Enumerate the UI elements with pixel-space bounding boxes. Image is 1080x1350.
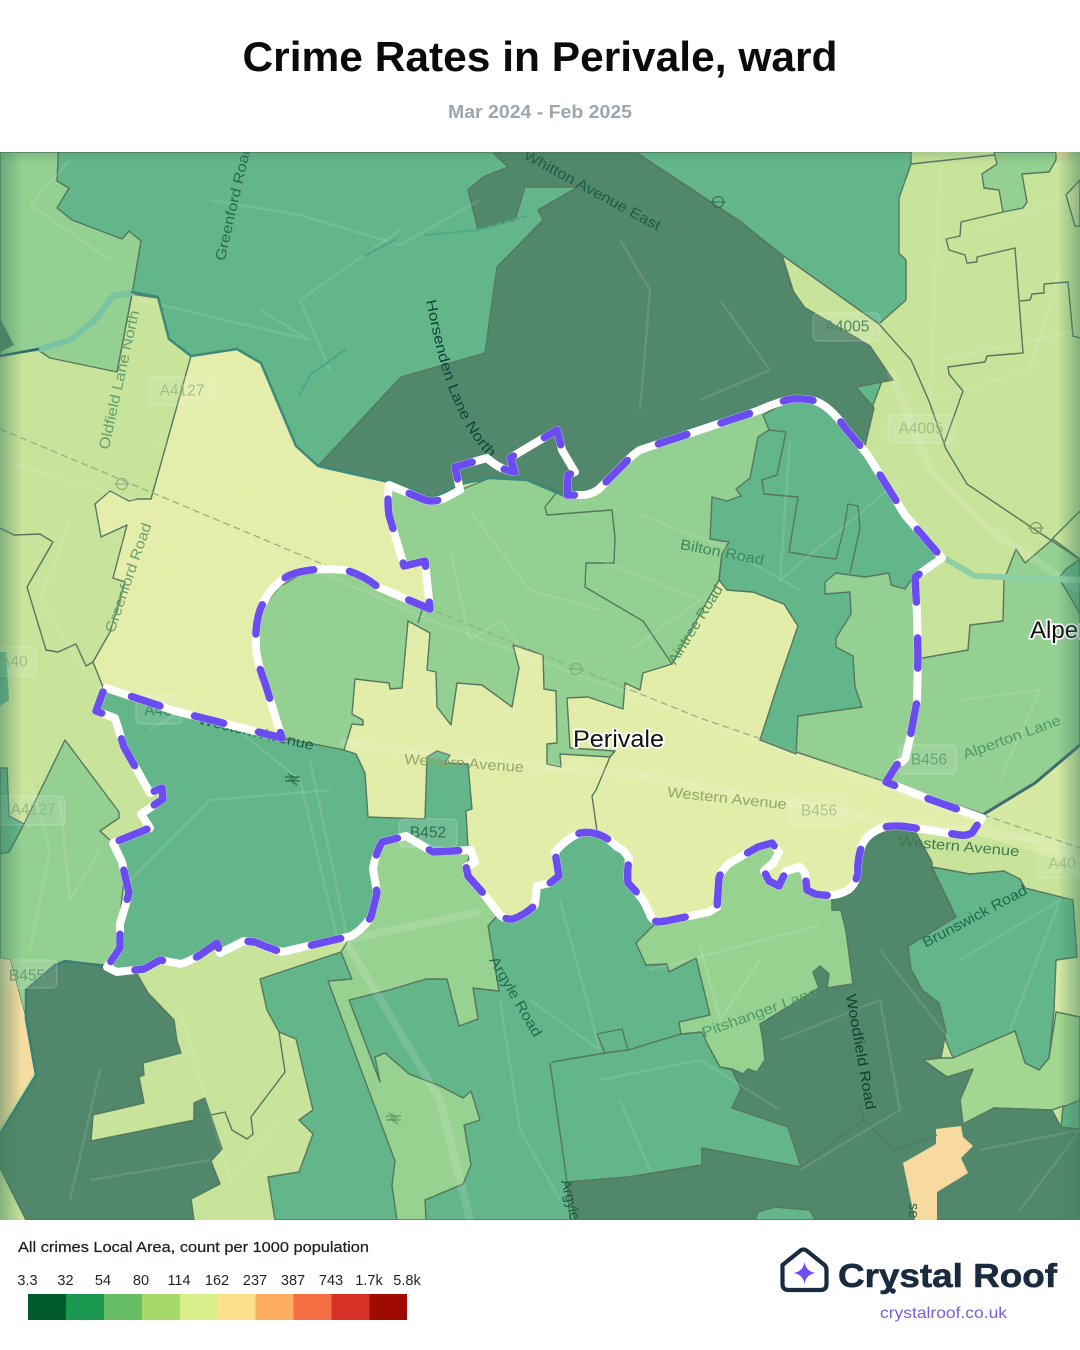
region: north-west mid green (0, 152, 141, 372)
region: ward south-west green (96, 687, 472, 972)
region: Pitshanger mid green (636, 843, 853, 1074)
ward boundary: Perivale (96, 399, 982, 972)
badge: B452 (399, 819, 457, 847)
logo wordmark: Crystal Roof (838, 1258, 1058, 1295)
legend values: 5.8k (393, 1273, 421, 1289)
badge: B452: B452 (410, 824, 446, 842)
legend title: All crimes Local Area, count per 1000 population (18, 1240, 369, 1256)
railway line (0, 429, 1080, 848)
region: Perivale ward base yellow (345, 582, 976, 918)
region: south mid green (328, 836, 499, 1220)
region: north-east orange sliver (1056, 152, 1070, 158)
badge: A4127 north (149, 377, 216, 405)
label: Bilton Road: Bilton Road (679, 537, 765, 569)
title: Crime Rates in Perivale, ward (242, 33, 838, 80)
internal area boundary lines (0, 155, 1080, 1220)
region: Brunswick Road green (908, 867, 1077, 1070)
icon: tube roundel Sudbury (710, 196, 726, 208)
rail and tube station icons (114, 196, 1044, 1124)
region: east green edge (1059, 559, 1080, 614)
badge: A40 east: A40 (1048, 856, 1076, 872)
region: south-west dark (0, 961, 222, 1220)
label: Western Avenue east: Western Avenue (898, 834, 1020, 860)
region: west mid green (0, 740, 124, 1019)
road badges (0, 313, 1080, 988)
label: Greenford Road north: Greenford Road (213, 144, 255, 262)
region: far west dark sliver (0, 318, 14, 352)
badge: B456 east (899, 745, 956, 774)
label: Oldfield Lane North: Oldfield Lane North (97, 309, 143, 451)
label: Whitton Avenue East: Whitton Avenue East (521, 148, 663, 234)
badge: A4005 east (888, 415, 955, 443)
region: south green strip (260, 952, 397, 1220)
region: west green slivers (0, 768, 24, 854)
legend values: 54 (95, 1273, 111, 1289)
label: road fragment at bottom: se (905, 1203, 921, 1218)
legend (17, 1240, 421, 1320)
road name labels (100, 152, 1060, 1273)
logo: Crystal Roof (782, 1250, 1058, 1322)
waterway: Grand Union canal (0, 215, 1080, 1134)
badge: A4005 north (813, 313, 880, 341)
legend colour scale (28, 1294, 407, 1320)
icon: tube roundel Greenford (114, 478, 130, 490)
label: Argyle Road: Argyle Road (486, 954, 544, 1040)
label: Western Avenue west: Western Avenue (197, 712, 315, 754)
badge: A4005 north: A4005 (825, 318, 869, 336)
logo descender detail (890, 1288, 896, 1294)
legend values: 1.7k (355, 1273, 383, 1289)
road network texture (0, 160, 1080, 1220)
legend values: 387 (281, 1273, 305, 1289)
region: south-west orange (0, 958, 36, 1128)
region: orange higher crime patch (903, 1126, 973, 1220)
icon: tube roundel Alperton (1028, 522, 1044, 534)
label: Western Avenue centre: Western Avenue (404, 752, 524, 776)
region: Alperton mid green (886, 539, 1080, 814)
region: ward north-east green (710, 399, 942, 754)
map edge vignette (0, 152, 1080, 1220)
icon: house with star (782, 1250, 826, 1290)
legend values: 743 (319, 1273, 343, 1289)
region: east green corner (1061, 1100, 1080, 1129)
region: ward north mid green (256, 399, 942, 782)
icon: rail Drayton Green (386, 1113, 401, 1124)
label: Greenford Road south: Greenford Road (103, 521, 155, 635)
region: south-east dark low crime area (567, 826, 1080, 1220)
badge: A40 west (0, 647, 36, 676)
label: Alperton Lane: Alperton Lane (961, 713, 1063, 763)
legend values (17, 1273, 421, 1289)
legend values: 32 (57, 1273, 74, 1289)
badge: A4005 east: A4005 (899, 420, 943, 438)
badge: A40 south-west: A40 (144, 702, 172, 720)
region: bottom small green patch (755, 1207, 815, 1220)
logo url: crystalroof.co.uk (880, 1305, 1008, 1322)
region: Horsenden Hill dark low crime area (318, 153, 893, 498)
legend values: 114 (167, 1273, 191, 1289)
legend values: 162 (205, 1273, 229, 1289)
region: north-east pale patch (1066, 180, 1080, 226)
legend values: 237 (243, 1273, 267, 1289)
badge: A40 south-west (136, 695, 182, 724)
badge: B456 west (790, 797, 847, 825)
icon: rail Ealing (285, 774, 300, 785)
badge: A4127 west: A4127 (11, 802, 55, 818)
badge: B455: B455 (9, 968, 45, 984)
badge: B455 (0, 960, 57, 988)
place label: Perivale: Perivale (573, 726, 664, 753)
region: south-east mid green (923, 1012, 1080, 1124)
label: Western Avenue centre-east: Western Avenue (666, 785, 788, 813)
label: Woodfield Road: Woodfield Road (842, 993, 878, 1111)
region: Argyle Road green (349, 833, 801, 1220)
badge: A40 west: A40 (0, 654, 28, 670)
region: far west green sliver (0, 652, 9, 706)
icon: tube roundel Perivale (568, 664, 584, 674)
badge: A4127 west (0, 796, 65, 825)
region: Western Avenue east yellow-green (972, 745, 1080, 1017)
region: northern green areas (57, 152, 911, 482)
badge: A40 east (1037, 849, 1080, 878)
label: Horsenden Lane North: Horsenden Lane North (426, 300, 494, 456)
label: Aintree Road: Aintree Road (665, 583, 727, 667)
legend values: 3.3 (17, 1273, 38, 1289)
badge: A4127 north: A4127 (160, 382, 204, 400)
label: Pitshanger Lane: Pitshanger Lane (700, 985, 820, 1041)
badge: B456 west: B456 (801, 802, 837, 820)
label: Brunswick Road: Brunswick Road (920, 883, 1030, 951)
region: north-east mid patch (982, 152, 1056, 212)
legend values: 80 (133, 1273, 149, 1289)
region: north-west yellow (93, 349, 430, 738)
subtitle: date range: Mar 2024 - Feb 2025 (448, 101, 632, 122)
badge: B456 east: B456 (911, 752, 947, 768)
label: Argyle Road bottom: Argyle Road (557, 1178, 592, 1259)
